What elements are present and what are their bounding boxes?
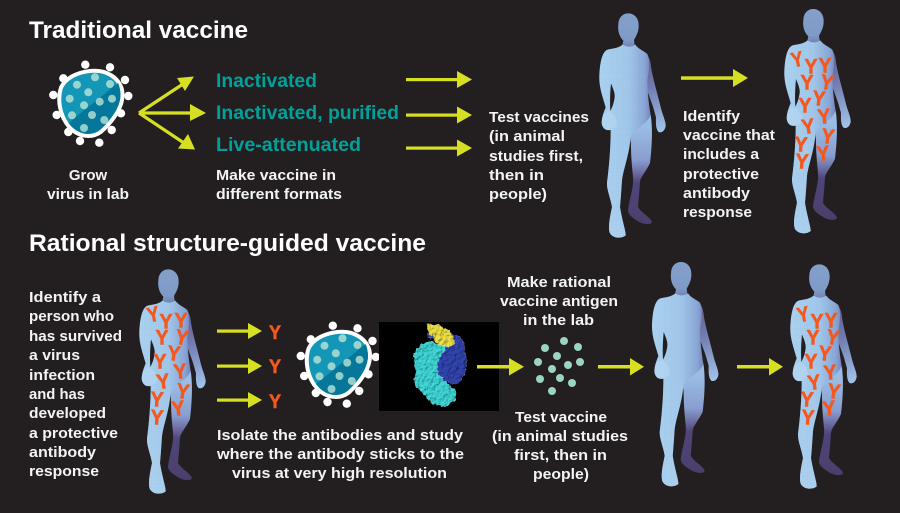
figure: survivor with antibodies: Y	[155, 370, 171, 394]
isolated antibodies: Y	[269, 357, 281, 378]
figure: human body with antibodies, traditional: Y	[798, 94, 812, 118]
text: test vaccines: then in	[489, 167, 544, 184]
caption: isolate antibodies: virus at very high resolution	[232, 465, 447, 482]
text: test vaccines: Test vaccines	[489, 109, 589, 126]
icon: plus	[388, 358, 402, 372]
figure: survivor with antibodies: Y	[174, 310, 188, 332]
text: identify a person: and has	[29, 386, 85, 403]
isolated antibodies	[269, 323, 281, 413]
text: test vaccine: people)	[533, 466, 589, 483]
text: test vaccine: Test vaccine	[515, 409, 607, 426]
figure: human body with antibodies, traditional: Y	[800, 72, 814, 94]
figure: human body with antibodies, traditional: Y	[795, 150, 809, 174]
arrow: to test subject	[598, 358, 644, 376]
figure: human body with antibodies, traditional: Y	[816, 105, 832, 129]
icon: virus studied	[297, 322, 380, 408]
figure: human body with antibodies, traditional: Y	[789, 47, 805, 72]
figure: human body with antibodies, traditional: Y	[800, 115, 816, 139]
figure: survivor with antibodies: Y	[145, 302, 161, 327]
figure: human body with antibodies, rational: Y	[806, 371, 822, 395]
text: test vaccines: studies first,	[489, 148, 583, 165]
figure: human body test subject	[652, 262, 718, 486]
figure: survivor with antibodies: Y	[156, 326, 168, 350]
text: identify a person	[29, 289, 122, 480]
vaccine antigen particles	[534, 337, 584, 395]
figure: survivor with antibodies: Y	[166, 342, 182, 366]
figure: human body with antibodies, traditional: Y	[818, 54, 832, 78]
figure: human body with antibodies, rational: Y	[822, 361, 838, 385]
figure: human body with antibodies, traditional: Y	[811, 87, 827, 111]
text: make rational vaccine antigen	[500, 274, 618, 329]
caption: isolate antibodies	[216, 427, 464, 482]
text: test vaccines: (in animal	[489, 128, 565, 145]
figure: human body with antibodies, rational: Y	[806, 326, 820, 350]
figure: human body with antibodies, rational: Y	[826, 380, 842, 404]
caption: grow virus in lab: Grow	[69, 167, 107, 184]
text: identify a person: Identify a	[29, 289, 102, 306]
image: protein structure	[379, 322, 499, 411]
text: test vaccines	[489, 109, 589, 203]
figure: human body with antibodies, rational: Y	[795, 302, 811, 327]
arrow: to vaccine antigen	[477, 358, 524, 376]
caption: make vaccine in different formats: Make vaccine in	[216, 167, 336, 184]
figure: human body with antibodies, rational: Y	[810, 310, 824, 334]
caption: grow virus in lab: virus in lab	[47, 186, 129, 203]
figure: survivor with antibodies: Y	[173, 326, 190, 350]
caption: make vaccine in different formats	[216, 167, 342, 203]
figure: human body with antibodies, rational: Y	[817, 342, 833, 366]
text: identify a person: person who	[29, 308, 114, 325]
isolated antibodies: Y	[269, 392, 281, 413]
arrows: branching to three formats	[139, 76, 206, 150]
figure: human body with antibodies, traditional: Y	[820, 125, 836, 149]
figure: human body with antibodies, rational	[790, 264, 857, 489]
text: identify vaccine: Identify	[683, 108, 741, 125]
figure: human body with antibodies, rational: Y	[801, 406, 815, 430]
figure: human body with antibodies, traditional: Y	[815, 142, 831, 166]
figure: human body with antibodies, traditional: Y	[804, 56, 818, 78]
text: test vaccine: (in animal studies	[492, 428, 628, 445]
figure: human body with antibodies, rational: Y	[804, 350, 818, 374]
arrow: to identify vaccine	[681, 69, 748, 87]
text: test vaccine	[492, 409, 628, 483]
caption: isolate antibodies: Isolate the antibodies and study	[217, 427, 464, 444]
figure: human body before response	[599, 13, 666, 238]
text: identify vaccine: antibody	[683, 185, 751, 202]
vaccine format labels: Live-attenuated	[216, 135, 361, 156]
caption: isolate antibodies: where the antibody sticks to the	[216, 446, 464, 463]
figure: human body with antibodies, traditional: Y	[794, 133, 808, 157]
vaccine format labels	[216, 71, 399, 156]
figure: human body with antibodies, rational: Y	[800, 388, 814, 412]
figure: human body with antibodies, traditional	[784, 9, 851, 233]
text: identify vaccine: protective	[683, 166, 759, 183]
figure: survivor with antibodies: Y	[160, 310, 172, 334]
figure: human body with antibodies, rational: Y	[824, 326, 841, 350]
text: identify a person: antibody	[29, 444, 97, 461]
text: identify vaccine: vaccine that	[683, 127, 775, 144]
figure: survivor with antibodies: Y	[150, 388, 164, 412]
text: test vaccine: first, then in	[514, 447, 607, 464]
icon: virus grown in lab	[49, 60, 132, 147]
heading: rational structure-guided vaccine: Rational structure-guided vaccine	[29, 230, 426, 257]
figure: survivor with antibodies: Y	[170, 397, 186, 421]
figure: survivor with antibodies: Y	[154, 350, 166, 374]
text: make rational vaccine antigen: vaccine antigen	[500, 293, 618, 310]
text: identify a person: a virus	[29, 347, 80, 364]
text: identify vaccine: response	[683, 204, 752, 221]
vaccine format labels: Inactivated, purified	[216, 103, 399, 124]
text: identify vaccine	[683, 108, 775, 221]
figure: human body with antibodies, rational: Y	[821, 397, 837, 421]
text: identify a person: response	[29, 463, 99, 480]
text: make rational vaccine antigen: in the lab	[523, 312, 594, 329]
text: make rational vaccine antigen: Make rational	[507, 274, 611, 291]
figure: survivor with antibodies	[139, 269, 206, 494]
isolated antibodies: Y	[269, 323, 281, 344]
arrows: formats to testing	[406, 71, 472, 156]
figure: human body with antibodies, traditional: Y	[818, 71, 835, 95]
caption: make vaccine in different formats: different formats	[216, 186, 342, 203]
figure: survivor with antibodies: Y	[175, 380, 191, 404]
text: identify a person: has survived	[29, 328, 122, 345]
figure: human body with antibodies, rational: Y	[824, 310, 838, 332]
vaccine format labels: Inactivated	[216, 71, 317, 92]
figure: survivor with antibodies: Y	[172, 360, 188, 384]
arrow: to antibody response	[737, 358, 783, 376]
caption: grow virus in lab	[47, 167, 129, 203]
text: identify a person: a protective	[29, 425, 118, 442]
figure: survivor with antibodies: Y	[150, 406, 164, 430]
text: identify a person: infection	[29, 367, 95, 384]
text: identify vaccine: includes a	[683, 146, 760, 163]
text: test vaccines: people)	[489, 186, 547, 203]
heading: traditional vaccine: Traditional vaccine	[29, 17, 248, 44]
text: identify a person: developed	[29, 405, 106, 422]
arrows: isolate antibodies	[217, 323, 262, 408]
